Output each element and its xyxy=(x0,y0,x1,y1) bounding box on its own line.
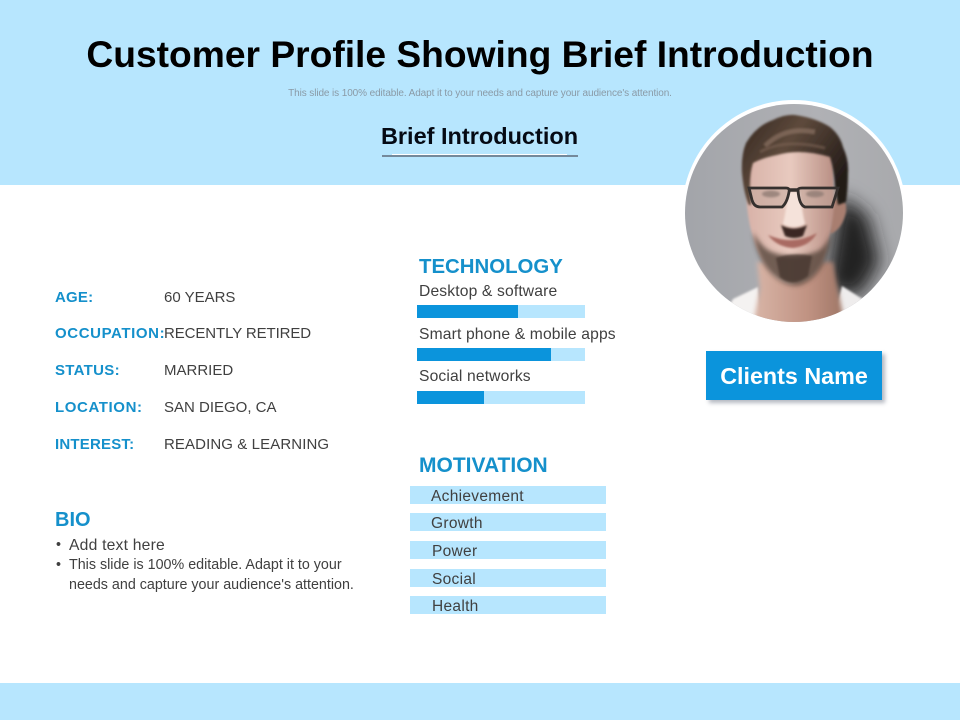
bio text: • xyxy=(56,557,61,573)
technology bars xyxy=(417,283,616,404)
profile facts list: OCCUPATION: xyxy=(55,325,165,342)
profile facts list xyxy=(55,289,329,453)
profile facts list: STATUS: xyxy=(55,362,120,379)
profile facts list: RECENTLY RETIRED xyxy=(164,325,311,342)
client name box: Clients Name xyxy=(720,363,868,389)
motivation list: Social xyxy=(432,571,476,588)
nose xyxy=(783,192,805,227)
profile facts list: INTEREST: xyxy=(55,436,134,453)
title: Customer Profile Showing Brief Introduction xyxy=(86,33,874,75)
profile facts list: READING & LEARNING xyxy=(164,436,329,453)
bottom band xyxy=(0,683,960,720)
client name box xyxy=(706,351,882,400)
bio text: Add text here xyxy=(69,537,165,554)
motivation list xyxy=(410,486,606,615)
portrait photo xyxy=(685,100,903,322)
bio text: needs and capture your audience's attention. xyxy=(69,577,354,593)
motivation list: Health xyxy=(432,598,479,615)
section heading: brief introduction: Brief Introduction xyxy=(381,123,578,149)
profile facts list: SAN DIEGO, CA xyxy=(164,399,277,416)
technology bars: Social networks xyxy=(419,368,531,385)
neck xyxy=(752,262,846,330)
profile facts list: MARRIED xyxy=(164,362,233,379)
ear xyxy=(830,199,846,234)
motivation list: Growth xyxy=(431,515,483,532)
technology heading: TECHNOLOGY xyxy=(419,256,563,278)
beard xyxy=(753,232,832,285)
technology bars: Desktop & software xyxy=(419,283,557,300)
mouth xyxy=(768,233,817,248)
top banner xyxy=(0,0,960,185)
shirt xyxy=(730,286,760,316)
profile facts list: 60 YEARS xyxy=(164,289,235,306)
bio heading: BIO xyxy=(55,509,91,531)
profile facts list: LOCATION: xyxy=(55,399,143,416)
glasses xyxy=(749,188,838,207)
bio text xyxy=(56,537,354,593)
face xyxy=(747,146,834,284)
white ring xyxy=(682,100,906,324)
technology bars: Smart phone & mobile apps xyxy=(419,326,616,343)
hair xyxy=(742,115,848,205)
motivation heading: MOTIVATION xyxy=(419,454,548,477)
eyes xyxy=(762,191,780,197)
motivation list: Achievement xyxy=(431,488,524,505)
profile facts list: AGE: xyxy=(55,289,93,306)
bio text: This slide is 100% editable. Adapt it to your xyxy=(69,557,342,573)
motivation list: Power xyxy=(432,543,477,560)
subtitle: This slide is 100% editable. Adapt it to your needs and capture your audience's attention. xyxy=(288,88,672,99)
bio text: • xyxy=(56,537,61,553)
